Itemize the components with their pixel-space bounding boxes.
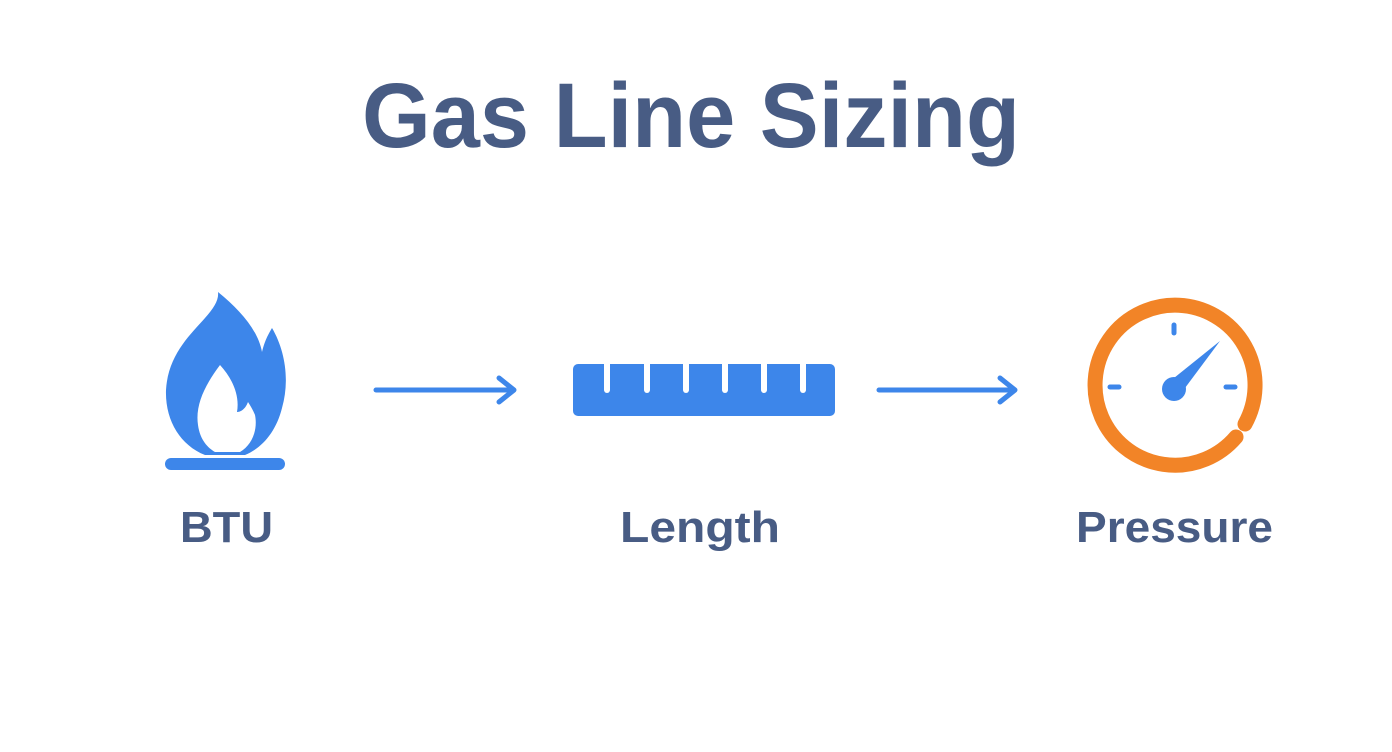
label: Length: Length — [620, 503, 780, 552]
arrow 1 — [376, 378, 514, 402]
icon: ruler — [573, 360, 835, 416]
icon: pressure gauge — [1085, 305, 1255, 486]
arrow 2 — [879, 378, 1015, 402]
title: Gas Line Sizing — [362, 65, 1020, 167]
icon: flame — [165, 292, 286, 470]
label: Pressure: Pressure — [1076, 503, 1273, 552]
label: BTU: BTU — [180, 503, 273, 552]
